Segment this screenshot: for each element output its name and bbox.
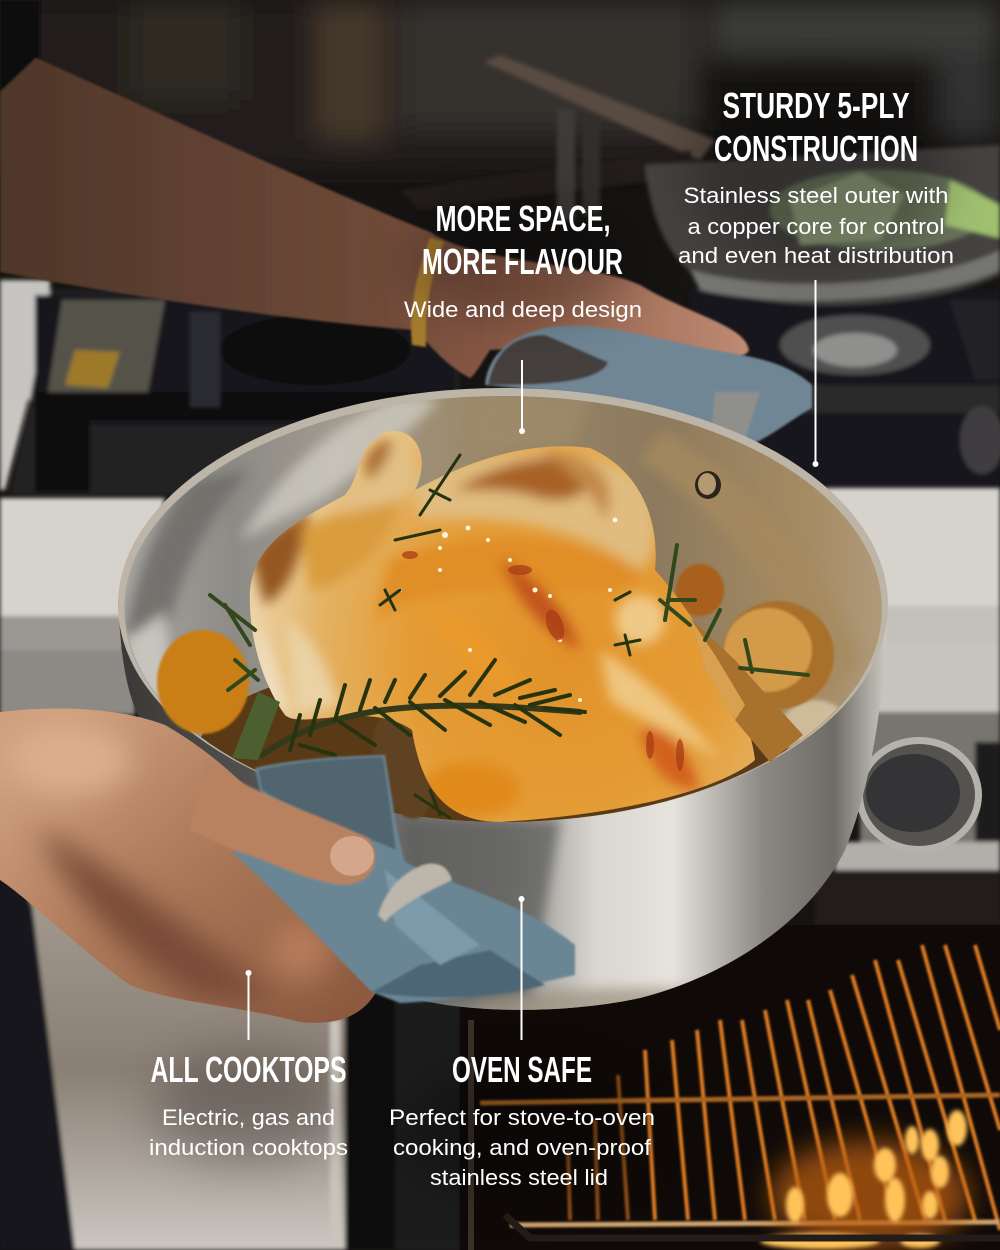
description: cooking, and oven-proof [393, 1135, 652, 1160]
thumbnail [330, 836, 374, 876]
callout: all cooktops [149, 970, 348, 1160]
top towel [485, 326, 812, 447]
description: a copper core for control [688, 214, 944, 239]
pan rim and interior [118, 388, 888, 835]
heading [422, 198, 623, 282]
text shade [153, 85, 946, 1195]
oven knob [856, 737, 982, 853]
description: Perfect for stove-to-oven [389, 1105, 655, 1130]
heading [714, 85, 918, 169]
description [149, 1105, 348, 1160]
description: induction cooktops [149, 1135, 348, 1160]
pointer [519, 360, 525, 434]
description: and even heat distribution [678, 243, 954, 268]
callout: sturdy 5-ply construction [678, 85, 954, 467]
rivet [695, 471, 721, 499]
pointer [812, 280, 818, 467]
pointer [518, 896, 524, 1040]
rosemary [210, 455, 808, 818]
roasted sides [157, 564, 834, 825]
description: Stainless steel outer with [684, 183, 948, 208]
lower towel [232, 755, 575, 1003]
lower hand [0, 700, 575, 1030]
description [678, 183, 954, 268]
description: Electric, gas and [162, 1105, 335, 1130]
skin flecks and salt [398, 518, 618, 702]
heading: ALL COOKTOPS [150, 1049, 346, 1090]
heading: OVEN SAFE [452, 1049, 592, 1090]
oven racks with flames [460, 925, 1000, 1250]
pan outer body [118, 600, 888, 1032]
chicken [250, 431, 803, 822]
heading: CONSTRUCTION [714, 128, 918, 169]
thumb [190, 758, 376, 885]
counter [0, 488, 1000, 925]
heading: MORE SPACE, [436, 198, 610, 239]
callout: more space, more flavour [404, 198, 642, 434]
pan [118, 388, 888, 1032]
heading: STURDY 5-PLY [722, 85, 910, 126]
description: Wide and deep design [404, 297, 642, 322]
hand back [0, 708, 376, 1023]
callout: oven safe [389, 896, 655, 1190]
stove right and frying pan [400, 55, 1000, 490]
potato [722, 601, 834, 709]
upper arm and hand [0, 0, 749, 378]
pan handle [378, 864, 452, 922]
lemon [157, 630, 249, 734]
cabinet and apron [0, 880, 470, 1250]
pointer [246, 970, 252, 1040]
description [389, 1105, 655, 1190]
description: stainless steel lid [430, 1165, 608, 1190]
heading: MORE FLAVOUR [422, 241, 623, 282]
stove left [0, 280, 470, 495]
wing [690, 618, 803, 762]
